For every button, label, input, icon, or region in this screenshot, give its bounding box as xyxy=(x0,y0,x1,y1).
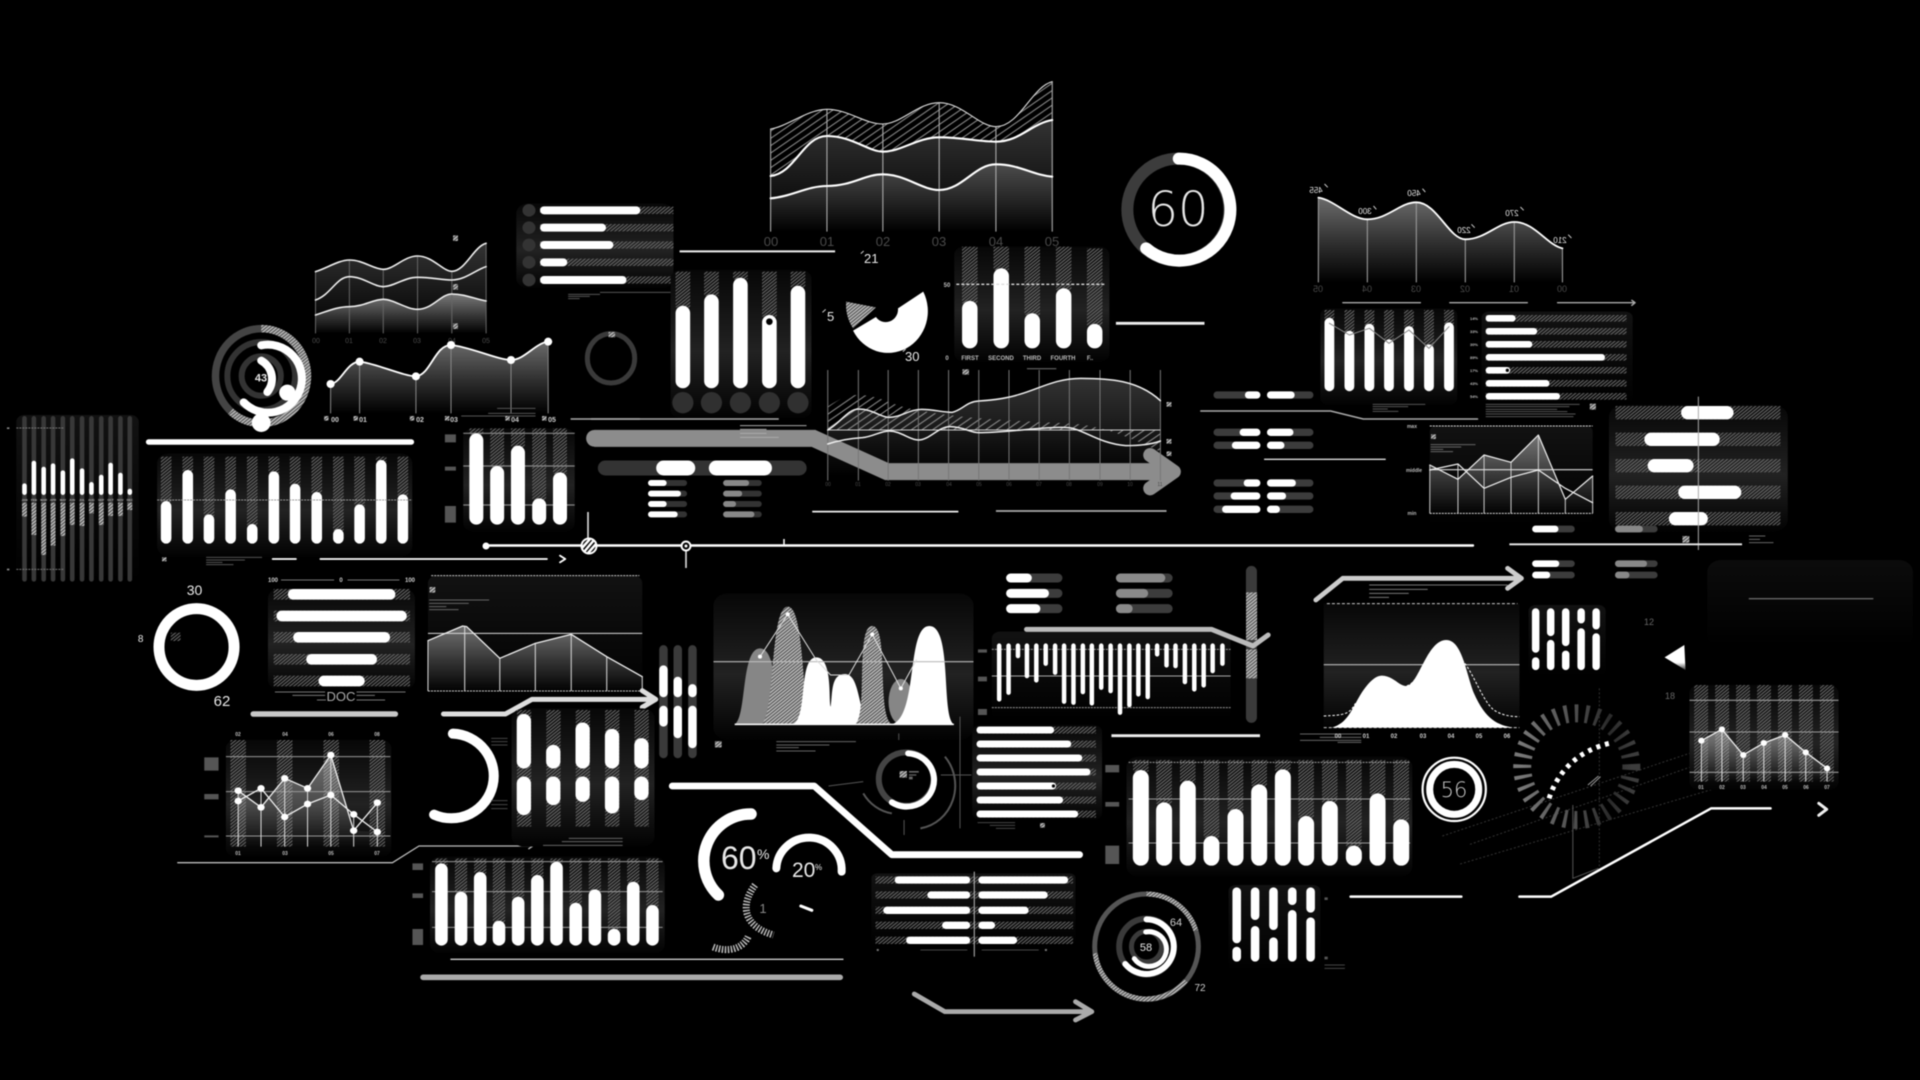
chart: layered wave with grey process arrow: 05 xyxy=(976,482,982,488)
chart: radial sector pie: 5 xyxy=(827,309,834,324)
chart: white hill area: 00 xyxy=(1335,734,1342,740)
chart: sawtooth bars with slider xyxy=(978,571,1268,720)
chart: white hill area xyxy=(1300,603,1519,742)
chart: dual series with hatched columns: 04 xyxy=(282,732,288,738)
chart: mirrored value area: 220 xyxy=(1457,226,1471,235)
gauge: radial tick dial xyxy=(1442,688,1727,878)
chart: dual series with hatched columns: 05 xyxy=(328,851,334,857)
chart: mirrored value area: 00 xyxy=(1557,284,1567,294)
panel: funnel bars DOC: 100 xyxy=(405,578,416,584)
gauge: ring 58 64 72: 58 xyxy=(1140,942,1152,954)
chart: radial sector pie xyxy=(822,251,928,364)
chart: dual series with hatched columns: 08 xyxy=(374,732,380,738)
chart: seven point line with glow: 06 xyxy=(1803,785,1809,791)
panel: monthly mirrored bars: APR xyxy=(50,498,57,502)
icon: white wedge with labels: 18 xyxy=(1665,691,1675,701)
chart: triple wave area: 02 xyxy=(379,338,387,345)
panel: monthly mirrored bars: MAR xyxy=(40,498,48,502)
panel: seven long horizontal bars xyxy=(972,725,1260,828)
chart: mirrored value area: 210 xyxy=(1553,236,1567,245)
pill rows: bottom right pairs xyxy=(1536,529,1654,575)
chart: radial sector pie: 30 xyxy=(905,349,919,364)
arrow: bottom grey arrow xyxy=(914,994,1092,1020)
chart: dotted line area 00 to 05: 00 xyxy=(331,417,339,424)
icon: white wedge with labels xyxy=(1644,617,1686,701)
panel: floating horizontal bars xyxy=(1509,397,1788,550)
chart: mirrored value area: 450 xyxy=(1407,189,1421,198)
chart: mirrored value area: 05 xyxy=(1313,284,1323,294)
panel: ranked bars first to fifth: 0 xyxy=(945,356,949,362)
gauge: concentric ring 43: 43 xyxy=(255,372,267,384)
chart: seven point line with glow xyxy=(1689,685,1839,791)
chart: dual series with hatched columns: 03 xyxy=(282,851,288,857)
chart: large hatched wave area: 05 xyxy=(1045,234,1059,249)
panel: paired vertical bars xyxy=(512,708,654,847)
chart: mirrored value area: 01 xyxy=(1509,284,1519,294)
chart: seven point line with glow: 02 xyxy=(1719,785,1725,791)
chart: dotted line area 00 to 05: 02 xyxy=(416,417,424,424)
panel: overlapping peaks xyxy=(713,593,973,751)
ring: 30 62 8: 8 xyxy=(138,634,144,645)
chart: large hatched wave area: 03 xyxy=(932,234,946,249)
gauge: ring 58 64 72: 64 xyxy=(1170,917,1182,929)
chart: max middle min lines: middle xyxy=(1406,468,1422,474)
chart: max middle min lines xyxy=(1406,424,1593,526)
gauge: ring 58 64 72: 72 xyxy=(1194,983,1206,994)
chart: dual series with hatched columns: 01 xyxy=(235,851,241,857)
chart: seven point line with glow: 07 xyxy=(1824,785,1830,791)
timeline slider with markers xyxy=(482,512,1473,568)
chart: layered wave with grey process arrow: 00 xyxy=(825,482,831,488)
chart: layered wave with grey process arrow: 06 xyxy=(1006,482,1012,488)
chart: large hatched wave area: 04 xyxy=(989,234,1003,249)
chart: layered wave with grey process arrow: 04 xyxy=(946,482,952,488)
ring: 30 62 8 xyxy=(138,582,234,710)
chart: white hill area: 04 xyxy=(1448,734,1455,740)
panel: seven bars with zigzag xyxy=(1201,308,1478,419)
panel: seven percent horizontal bars: 17% xyxy=(1470,368,1478,373)
panel: five rounded bars with dots xyxy=(571,251,835,419)
panel: funnel bars DOC: DOC xyxy=(327,689,355,704)
pill rows: centre right xyxy=(1217,395,1386,509)
panel: monthly mirrored bars: NOV xyxy=(117,498,124,502)
chart: radial sector pie: 21 xyxy=(864,251,878,266)
chart: mirrored value area: 455 xyxy=(1309,186,1323,195)
chart: seven point line with glow: 04 xyxy=(1761,785,1767,791)
panel: seven percent horizontal bars: 14% xyxy=(1470,316,1478,321)
panel: split vertical bars lower xyxy=(1229,885,1345,972)
chart: max middle min lines: min xyxy=(1408,511,1416,517)
chart: layered wave with grey process arrow: 08 xyxy=(1066,482,1072,488)
gauge: ring 60 xyxy=(1127,159,1230,261)
gauge: 60 percent and 20 percent arcs: % xyxy=(757,846,769,862)
chart: seven point line with glow: 01 xyxy=(1698,785,1704,791)
chart: layered wave with grey process arrow: 10 xyxy=(1127,482,1133,488)
chart: white hill area: 02 xyxy=(1391,734,1398,740)
gauge: concentric ring 43 xyxy=(216,329,307,432)
chart: triple wave area: 05 xyxy=(482,338,490,345)
ring: 30 62 8: 30 xyxy=(187,582,202,598)
panel: monthly mirrored bars: MAY xyxy=(60,498,66,502)
panel: split vertical bars upper xyxy=(1529,605,1606,677)
panel: monthly mirrored bars: AUG xyxy=(88,498,95,502)
panel: funnel bars DOC: 100 xyxy=(268,578,279,584)
gauge: 60 percent and 20 percent arcs: 20 xyxy=(792,859,815,882)
panel: seven percent horizontal bars: 43% xyxy=(1470,381,1478,386)
chart: layered wave with grey process arrow xyxy=(586,370,1174,512)
panel: seven percent horizontal bars xyxy=(1470,312,1633,417)
arrow: light angled arrow to triple bars xyxy=(443,691,656,714)
panel: seven percent horizontal bars: 30% xyxy=(1470,342,1478,347)
panel: ranked bars first to fifth xyxy=(944,247,1204,375)
pill rows: above sawtooth xyxy=(1011,578,1168,609)
panel: monthly mirrored bars: OCT xyxy=(107,498,114,502)
gauge: radar ring xyxy=(829,717,971,835)
panel: ranked bars first to fifth: SECOND xyxy=(988,356,1015,362)
chart: dotted line area 00 to 05: 01 xyxy=(359,417,367,424)
panel: seven percent horizontal bars: 89% xyxy=(1470,355,1478,360)
gauge: 60 percent and 20 percent arcs: 60 xyxy=(721,840,757,876)
panel: monthly mirrored bars: JAN xyxy=(21,498,28,502)
pill group under the arrow xyxy=(605,468,799,514)
chart: seven point line with glow: 05 xyxy=(1782,785,1788,791)
chart: mirrored value area: 03 xyxy=(1411,284,1421,294)
panel: list bars with round markers xyxy=(516,203,694,299)
chart: dual series with hatched columns: 06 xyxy=(328,732,334,738)
panel: ranked bars first to fifth: FIRST xyxy=(961,356,979,362)
panel: seven percent horizontal bars: 33% xyxy=(1470,329,1478,334)
chart: large hatched wave area: 01 xyxy=(820,234,834,249)
panel: funnel bars DOC: 0 xyxy=(339,578,343,584)
chart: dual series with hatched columns xyxy=(178,732,532,863)
chart: mirrored value area: 02 xyxy=(1460,284,1470,294)
panel: monthly mirrored bars: JUN xyxy=(69,498,75,502)
gauge: 60 percent and 20 percent arcs: 1 xyxy=(759,901,767,916)
chart: seven point line with glow: 03 xyxy=(1740,785,1746,791)
gauge: ring 60: 60 xyxy=(1147,182,1209,238)
chart: layered wave with grey process arrow: 07 xyxy=(1036,482,1042,488)
open ring arc xyxy=(434,734,508,818)
connector: thick white angled line xyxy=(672,786,1080,855)
chart: mirrored value area: 300 xyxy=(1358,207,1372,216)
panel: ranked bars first to fifth: F.. xyxy=(1087,356,1093,362)
panel: funnel bars DOC xyxy=(253,578,416,714)
panel: ranked bars first to fifth: THIRD xyxy=(1023,356,1042,362)
panel: seven percent horizontal bars: 54% xyxy=(1470,394,1478,399)
chart: white hill area: 01 xyxy=(1363,734,1370,740)
chart: layered wave with grey process arrow: 01 xyxy=(855,482,861,488)
chart: dual series with hatched columns: 07 xyxy=(374,851,380,857)
chart: white hill area: 05 xyxy=(1476,734,1483,740)
chart: dotted line area 00 to 05 xyxy=(324,338,556,424)
chart: layered wave with grey process arrow: 02 xyxy=(885,482,891,488)
chart: large hatched wave area: 00 xyxy=(764,234,778,249)
chart: triple wave area: 01 xyxy=(345,338,353,345)
chart: layered wave with grey process arrow: 11 xyxy=(1157,482,1163,488)
chart: dotted line area 00 to 05: 03 xyxy=(450,417,458,424)
chart: white hill area: 06 xyxy=(1504,734,1511,740)
chart: layered wave with grey process arrow: 03 xyxy=(915,482,921,488)
chart: triple wave area: 00 xyxy=(312,338,320,345)
icon: small grey ring xyxy=(587,332,640,419)
gauge: ring 56 xyxy=(1423,758,1486,821)
chart: dotted line area 00 to 05: 05 xyxy=(548,417,556,424)
panel: monthly mirrored bars: FEB xyxy=(31,498,38,502)
chart: white hill area: 03 xyxy=(1420,734,1427,740)
chart: max middle min lines: max xyxy=(1407,424,1417,430)
panel: five tall bars with guide lines xyxy=(445,428,575,532)
panel: twelve bar chart bottom xyxy=(412,857,843,977)
arrow: upper right angled arrow xyxy=(1316,568,1521,600)
panel: big bar chart xyxy=(1105,757,1412,877)
panel: monthly mirrored bars: JUL xyxy=(79,498,85,502)
chart: dark panel polyline area xyxy=(428,576,642,704)
connector: lower right angled line with chevron xyxy=(1351,803,1827,897)
gauge: ring 56: 56 xyxy=(1441,778,1467,802)
chart: mirrored value area: 04 xyxy=(1362,284,1372,294)
panel: monthly mirrored bars xyxy=(7,415,139,583)
gauge: ring 58 64 72 xyxy=(1095,894,1206,999)
chart: layered wave with grey process arrow: 09 xyxy=(1097,482,1103,488)
panel: faint empty dark box xyxy=(1707,560,1913,647)
chart: dual series with hatched columns: 02 xyxy=(235,732,241,738)
triple vertical tracks xyxy=(663,649,721,754)
ring: 30 62 8: 62 xyxy=(214,693,230,710)
gauge: 60 percent and 20 percent arcs: % xyxy=(815,863,822,872)
panel: ranked bars first to fifth: FOURTH xyxy=(1050,356,1076,362)
icon: white wedge with labels: 12 xyxy=(1644,617,1654,627)
chart: triple wave area: 04 xyxy=(448,338,456,345)
chart: large hatched wave area xyxy=(764,82,1059,249)
chart: mirrored value area: 270 xyxy=(1505,209,1519,218)
panel: monthly mirrored bars: DEC xyxy=(127,498,134,502)
gauge: 60 percent and 20 percent arcs xyxy=(704,814,842,950)
panel: double sided horizontal bars xyxy=(871,872,1076,957)
panel: ranked bars first to fifth: 50 xyxy=(944,283,951,289)
panel: monthly mirrored bars: SEP xyxy=(98,498,104,502)
chart: triple wave area xyxy=(312,235,490,345)
chart: large hatched wave area: 02 xyxy=(876,234,890,249)
chart: dotted line area 00 to 05: 04 xyxy=(511,417,519,424)
chart: mirrored value area xyxy=(1309,184,1635,305)
chart: triple wave area: 03 xyxy=(413,338,421,345)
panel: twelve bar chart xyxy=(149,442,565,565)
